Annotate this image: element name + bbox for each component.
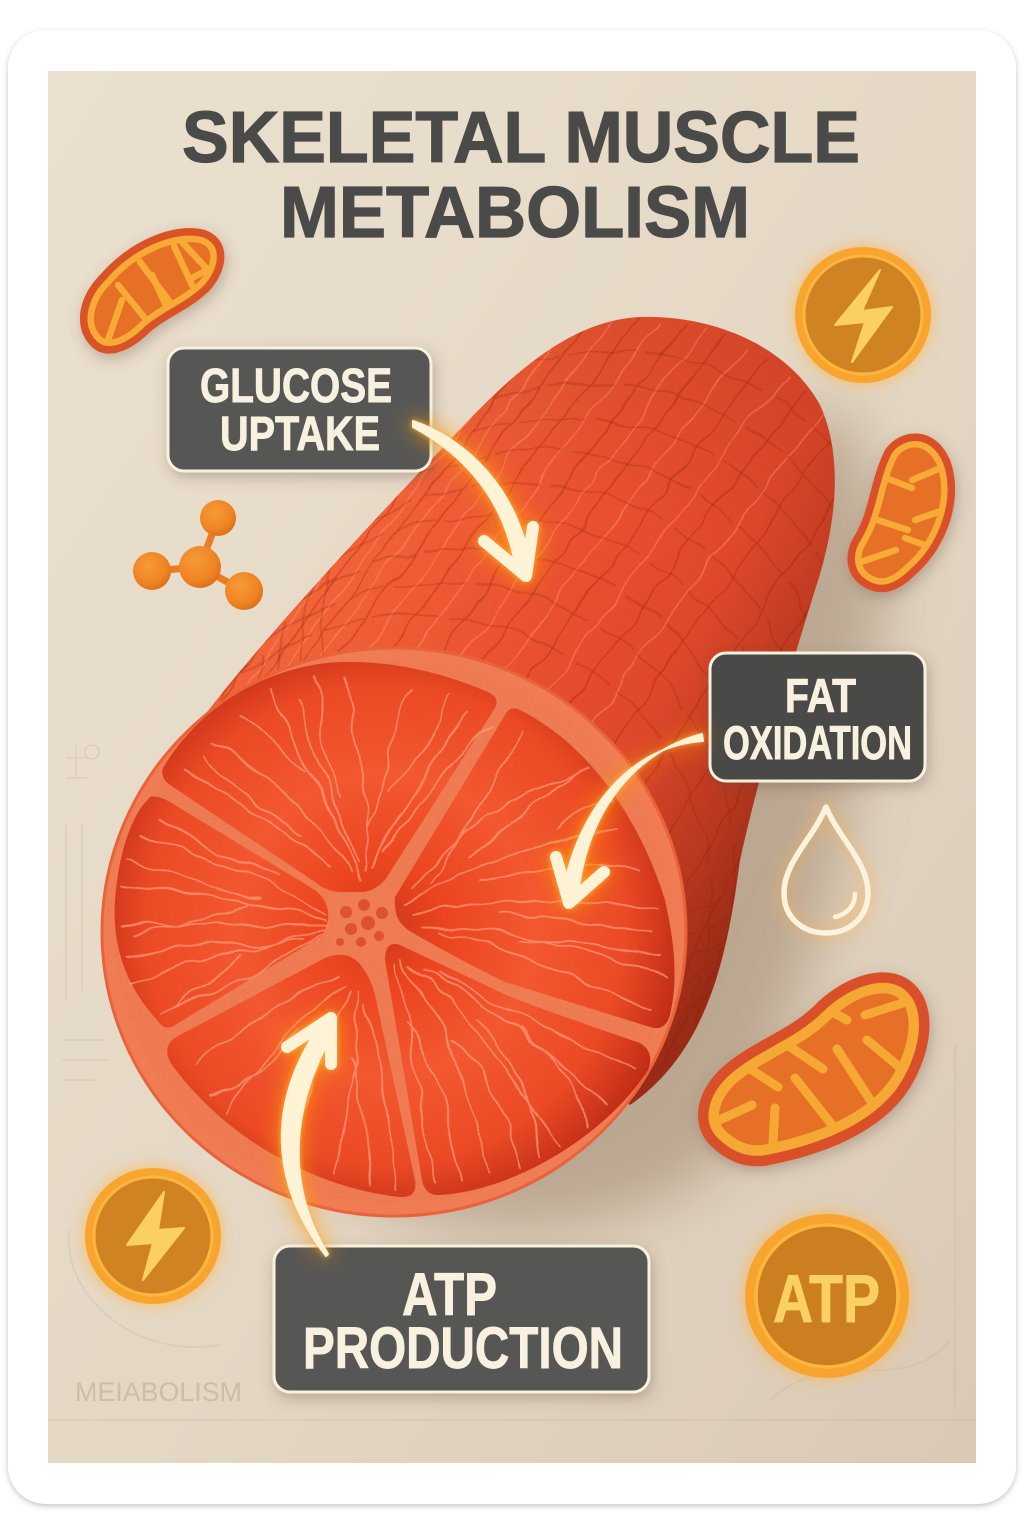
icon: glucose molecule xyxy=(133,500,263,610)
arrow: fat oxidation into muscle xyxy=(556,734,703,903)
icon: mitochondrion right xyxy=(847,434,958,592)
icon: energy bolt badge bottom left xyxy=(85,1168,221,1304)
label: fat oxidation: FAT xyxy=(785,669,856,722)
label: fat oxidation: OXIDATION xyxy=(723,716,912,769)
title: METABOLISM xyxy=(280,173,750,253)
label: ATP production: ATP xyxy=(402,1261,497,1328)
muscle body xyxy=(206,316,835,1105)
icon: ATP badge: ATP xyxy=(773,1261,880,1337)
icon: mitochondrion bottom right xyxy=(698,972,929,1166)
icon: ATP badge xyxy=(745,1214,909,1378)
muscle cross-section xyxy=(100,640,700,1230)
arrow: ATP production from muscle xyxy=(282,1018,334,1256)
label: ATP production xyxy=(274,1246,649,1392)
icon: fat droplet xyxy=(784,807,868,933)
arrow: glucose uptake into muscle xyxy=(413,421,533,576)
muscle fibre striations xyxy=(120,675,668,1192)
fascicle segments xyxy=(115,662,675,1197)
label: fat oxidation xyxy=(710,653,925,781)
muscle cylinder illustration xyxy=(100,316,835,1218)
label: ATP production: PRODUCTION xyxy=(303,1316,623,1381)
label: glucose uptake: GLUCOSE xyxy=(200,360,392,413)
icon: energy bolt badge top right xyxy=(795,247,931,383)
watermark details xyxy=(48,745,976,1420)
central hub xyxy=(328,885,410,960)
outer epimysium ring xyxy=(102,648,686,1216)
muscle cast shadow xyxy=(200,400,890,1231)
watermark details: MEIABOLISM xyxy=(75,1377,242,1407)
title: SKELETAL MUSCLE xyxy=(182,98,860,178)
title xyxy=(182,98,860,253)
icon: mitochondrion top left xyxy=(80,228,224,354)
label: glucose uptake xyxy=(168,348,431,471)
label: glucose uptake: UPTAKE xyxy=(220,408,380,461)
